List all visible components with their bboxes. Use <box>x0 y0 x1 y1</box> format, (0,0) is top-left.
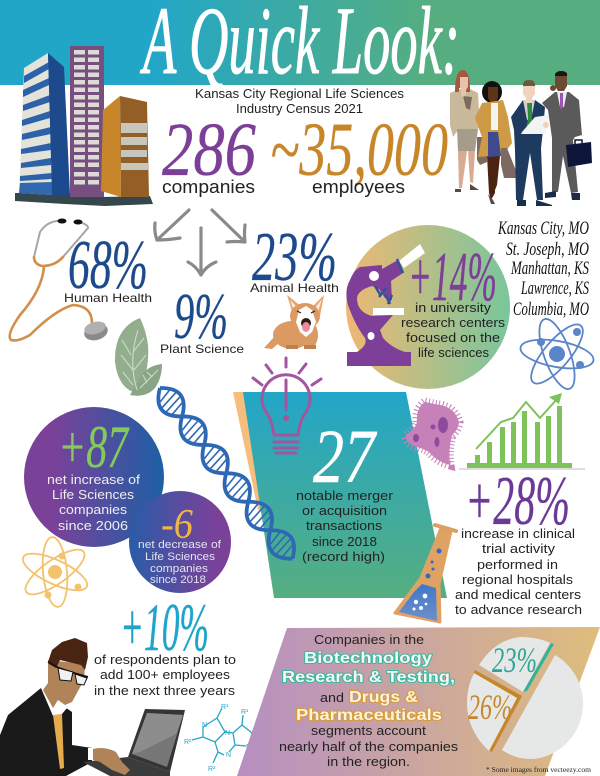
text: clinical trial description: regional hospitals <box>462 573 573 587</box>
icon: molecule: R¹ <box>241 709 249 716</box>
text: merger description <box>296 489 393 564</box>
icon: stethoscope <box>10 219 110 343</box>
stat: 9% plant science: Plant Science <box>160 342 244 356</box>
icon: bulb outline <box>262 375 310 453</box>
text: segments description: Research & Testing, <box>282 669 455 686</box>
stat: 23% animal health: 23% <box>252 219 337 296</box>
icon: molecule: H <box>252 754 257 761</box>
stat: 68% human health: 68% <box>68 227 148 304</box>
text: hiring plans: in the next three years <box>94 684 235 698</box>
icon: molecule: R¹ <box>263 726 271 733</box>
stat: 35,000 employees: employees <box>312 177 405 197</box>
stat: 27: 27 <box>313 415 377 499</box>
stat: 35,000 employees <box>270 108 448 197</box>
stat: 23% animal health: Animal Health <box>250 281 339 295</box>
label: 23%: 23% <box>492 640 537 680</box>
text: segments description: Pharmaceuticals <box>296 707 442 724</box>
text: census subtitle: Kansas City Regional Life Sciences <box>195 87 404 101</box>
icon: orange atom <box>18 536 92 608</box>
text: clinical trial description <box>455 527 582 617</box>
text: net increase description: since 2006 <box>58 519 128 533</box>
panel: +87 net increase circle <box>24 407 164 547</box>
text: segments description: in the region. <box>327 755 410 769</box>
label: 26%: 26% <box>468 687 512 727</box>
icon: bulb rays <box>247 358 327 420</box>
text: segments description: nearly half of the companies <box>279 740 458 754</box>
header banner <box>0 0 600 85</box>
stat: 286 companies: 286 <box>162 108 256 192</box>
stat: +14%: +14% <box>408 239 497 316</box>
text: census subtitle: Industry Census 2021 <box>236 102 363 116</box>
text: university description: research centers <box>401 316 505 330</box>
text: merger description: or acquisition <box>302 504 387 518</box>
icon: molecule <box>184 704 271 773</box>
stat: 68% human health: Human Health <box>64 291 152 305</box>
panel: biotech and pharma segments <box>237 627 600 776</box>
icon: molecule: R² <box>184 739 192 746</box>
stat: 9% plant science: 9% <box>174 280 228 353</box>
text: segments description: and <box>320 691 344 705</box>
stat: 68% human health <box>64 227 152 305</box>
text: segments description: Companies in the <box>314 633 424 647</box>
stat: -6: -6 <box>161 502 193 548</box>
text: clinical trial description: and medical centers <box>455 588 581 602</box>
text: clinical trial description: trial activity <box>482 542 556 556</box>
icon: molecule: N <box>246 744 251 751</box>
text: segments description: Biotechnology <box>304 650 432 667</box>
icon: DNA helix <box>151 381 302 566</box>
text: segments description: segments account <box>311 724 427 738</box>
arrows: split into segments <box>155 210 245 275</box>
text: university description: focused on the <box>406 331 500 345</box>
text: net increase description: net increase of <box>47 473 141 487</box>
panel: merger and acquisition <box>233 375 447 598</box>
icon: buildings <box>15 46 153 206</box>
text: merger description: since 2018 <box>312 535 377 549</box>
text: hiring plans <box>94 653 236 698</box>
text: university description <box>401 301 505 360</box>
text: segments description <box>279 633 458 769</box>
icon: molecule: R² <box>208 766 216 773</box>
stat: 9% plant science <box>160 280 244 356</box>
panel: -6 net decrease circle <box>129 491 231 593</box>
text: cities <box>497 218 589 320</box>
icon: microscope <box>346 244 425 366</box>
icon: molecule: N <box>226 752 231 759</box>
text: segments description: Drugs & <box>349 689 418 706</box>
icon: molecule: N <box>202 722 207 729</box>
text: merger description: transactions <box>306 519 382 533</box>
text: net increase description <box>47 473 141 533</box>
text: net increase description: companies <box>59 503 127 517</box>
stat: 23% animal health <box>250 219 339 296</box>
text: net decrease description: net decrease of <box>138 539 222 551</box>
text: university description: life sciences <box>418 346 489 360</box>
icon: growth chart <box>459 393 585 469</box>
stat: 35,000 employees: ~35,000 <box>270 108 448 192</box>
text: net increase description: Life Sciences <box>52 488 134 502</box>
icon: germ <box>406 402 459 465</box>
stat: +10%: +10% <box>120 589 209 665</box>
icon: molecule: R¹ <box>221 704 229 711</box>
text: clinical trial description: performed in <box>477 558 558 572</box>
stat: +87: +87 <box>58 414 130 480</box>
icon: flask <box>395 525 456 622</box>
text: census subtitle <box>195 87 404 116</box>
icon: leaves <box>115 318 162 396</box>
text: merger description: (record high) <box>302 550 385 564</box>
text: net decrease description: companies <box>150 563 209 575</box>
icon: corgi <box>264 295 324 349</box>
text: net decrease description: Life Sciences <box>145 551 216 563</box>
text: net decrease description: since 2018 <box>150 574 206 586</box>
text: clinical trial description: increase in clinical <box>461 527 575 541</box>
icon: blue atom <box>518 315 596 393</box>
icon: business people <box>450 70 592 206</box>
chart: pie <box>467 637 583 759</box>
text: hiring plans: add 100+ employees <box>100 668 230 682</box>
text: merger description: notable merger <box>296 489 393 503</box>
text: net decrease description <box>138 539 222 586</box>
stat: 286 companies: companies <box>162 177 255 197</box>
panel: university research circle <box>346 225 510 389</box>
icon: molecule: N <box>225 730 230 737</box>
icon: man at laptop <box>0 638 185 776</box>
text: clinical trial description: to advance research <box>455 603 582 617</box>
text: university description: in university <box>415 301 492 315</box>
footnote: * Some images from vecteezy.com <box>486 765 591 774</box>
text: hiring plans: of respondents plan to <box>94 653 236 667</box>
